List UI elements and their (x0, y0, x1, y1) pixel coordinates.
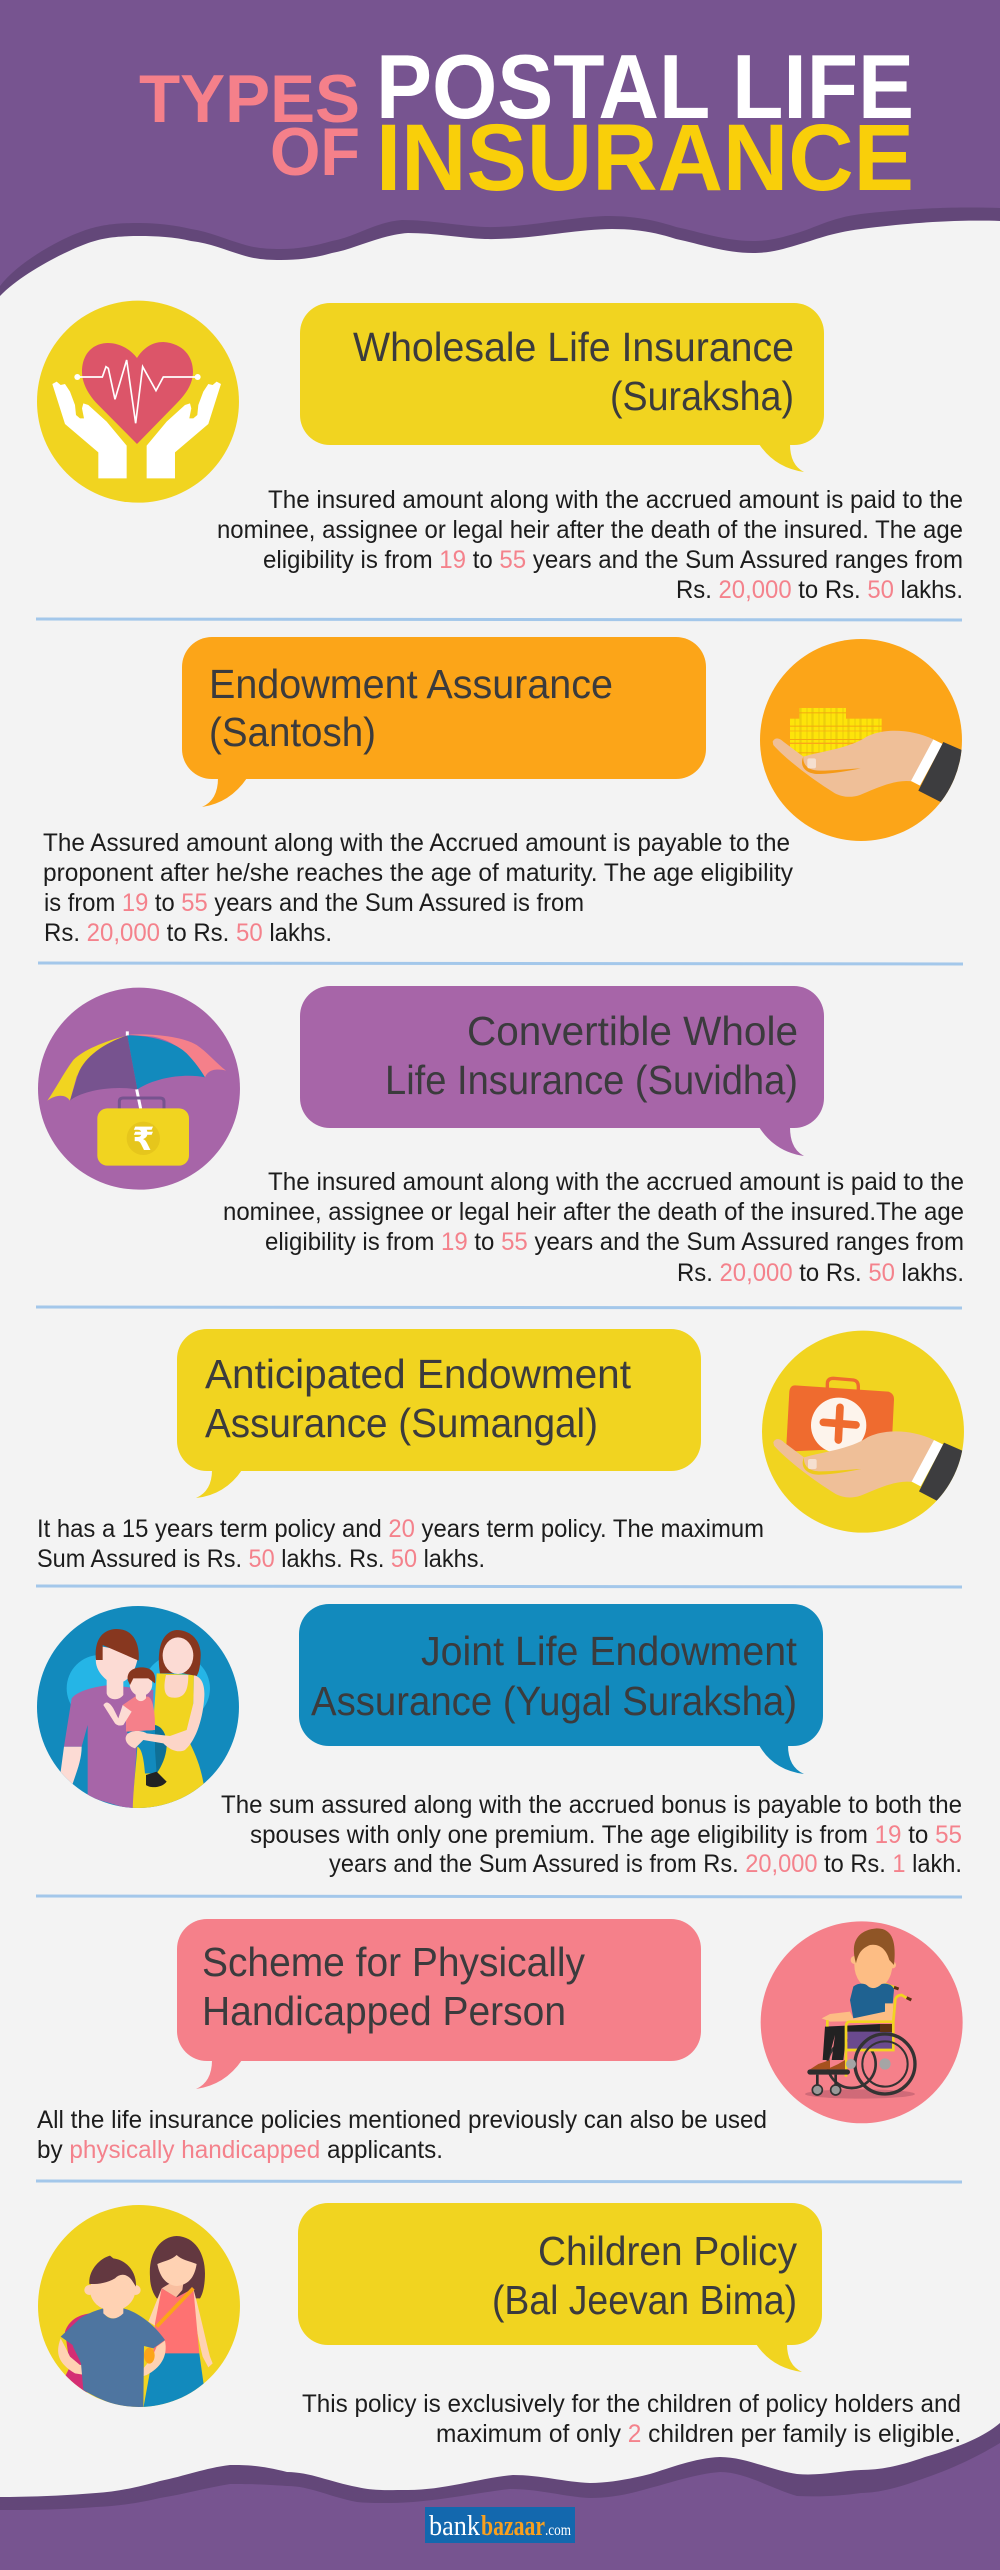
logo: bankbazaar: .com (545, 2522, 571, 2539)
panel: wholesale life insurance (37, 301, 963, 604)
text block: wholesale life: Rs. 20,000 to Rs. 50 lakhs. (676, 576, 963, 604)
text block: wholesale life: The insured amount along with the accrued amount is paid to the (268, 486, 963, 514)
speech bubble: anticipated (177, 1329, 701, 1498)
text block: children: This policy is exclusively for the children of policy holders and (302, 2390, 961, 2418)
text block: joint life: The sum assured along with the accrued bonus is payable to both the (221, 1791, 962, 1819)
text block: endowment: is from 19 to 55 years and the Sum Assured is from (44, 889, 584, 917)
speech bubble: endowment: Endowment Assurance (209, 661, 613, 707)
speech bubble: convertible: Convertible Whole (467, 1008, 798, 1054)
panel: endowment assurance (43, 637, 963, 947)
title: OF (270, 114, 360, 190)
logo: bankbazaar: bazaar (481, 2511, 545, 2542)
text block: convertible: The insured amount along with the accrued amount is paid to the (268, 1168, 964, 1196)
icon: umbrella over rupee case: ₹ (132, 1120, 154, 1158)
text block: endowment: The Assured amount along with the Accrued amount is payable to the (43, 829, 790, 857)
text block: joint life (221, 1791, 962, 1878)
text block: children: maximum of only 2 children per family is eligible. (436, 2420, 961, 2448)
title: INSURANCE (376, 105, 914, 211)
text block: endowment: proponent after he/she reaches the age of maturity. The age eligibility (43, 859, 793, 887)
speech bubble: wholesale life: Wholesale Life Insurance (353, 324, 794, 370)
icon: hand holding first aid case (762, 1331, 964, 1533)
text block: convertible: Rs. 20,000 to Rs. 50 lakhs. (677, 1259, 964, 1287)
speech bubble: wholesale life (300, 303, 824, 472)
text block: joint life: years and the Sum Assured is from Rs. 20,000 to Rs. 1 lakh. (329, 1850, 962, 1878)
panel: physically handicapped scheme (37, 1919, 963, 2164)
panel: convertible whole life insurance (38, 986, 964, 1287)
speech bubble: anticipated: Assurance (Sumangal) (205, 1400, 598, 1446)
title (139, 37, 914, 211)
speech bubble: convertible: Life Insurance (Suvidha) (385, 1057, 798, 1103)
text block: anticipated: It has a 15 years term policy and 20 years term policy. The maximum (37, 1515, 764, 1543)
icon: hand holding coins (760, 639, 963, 841)
speech bubble: endowment: (Santosh) (209, 709, 376, 755)
text block: convertible: eligibility is from 19 to 55 years and the Sum Assured ranges from (265, 1228, 964, 1256)
speech bubble: children: (Bal Jeevan Bima) (492, 2277, 797, 2323)
speech bubble: joint life: Assurance (Yugal Suraksha) (311, 1678, 797, 1724)
panel: children policy (38, 2203, 961, 2448)
speech bubble: handicapped (177, 1919, 701, 2089)
speech bubble: convertible (300, 986, 824, 1156)
text block: endowment (43, 829, 793, 947)
speech bubble: handicapped: Handicapped Person (202, 1988, 566, 2034)
speech bubble: handicapped: Scheme for Physically (202, 1939, 585, 1985)
panel: anticipated endowment assurance (37, 1329, 964, 1573)
text block: anticipated: Sum Assured is Rs. 50 lakhs. Rs. 50 lakhs. (37, 1545, 485, 1573)
speech bubble: children: Children Policy (538, 2228, 797, 2274)
text block: wholesale life: eligibility is from 19 to 55 years and the Sum Assured ranges from (263, 546, 963, 574)
text block: handicapped: by physically handicapped applicants. (37, 2136, 443, 2164)
logo: bankbazaar: bank (429, 2511, 480, 2542)
icon: person in wheelchair (761, 1921, 963, 2123)
logo: bankbazaar (425, 2507, 575, 2543)
header wave background (0, 0, 1000, 296)
text block: joint life: spouses with only one premium. The age eligibility is from 19 to 55 (250, 1821, 962, 1849)
text block: convertible (223, 1168, 964, 1287)
text block: handicapped: All the life insurance policies mentioned previously can also be used (37, 2106, 767, 2134)
icon: umbrella over rupee case (38, 988, 240, 1190)
icon: heart in caring hands (37, 301, 239, 503)
text block: endowment: Rs. 20,000 to Rs. 50 lakhs. (44, 919, 332, 947)
speech bubble: joint life (299, 1604, 823, 1774)
title: TYPES (139, 61, 360, 137)
speech bubble: anticipated: Anticipated Endowment (205, 1351, 632, 1397)
text block: convertible: nominee, assignee or legal heir after the death of the insured.The age (223, 1198, 964, 1226)
title: POSTAL LIFE (376, 37, 914, 138)
text block: wholesale life (217, 486, 963, 604)
panel: joint life endowment assurance (37, 1604, 962, 1878)
text block: children (302, 2390, 961, 2448)
speech bubble: wholesale life: (Suraksha) (610, 373, 794, 419)
footer wave background (0, 2423, 1000, 2570)
speech bubble: joint life: Joint Life Endowment (421, 1628, 798, 1674)
speech bubble: children (298, 2203, 822, 2372)
speech bubble: endowment (182, 637, 706, 807)
icon: family (37, 1606, 239, 1810)
icon: two children (38, 2205, 240, 2410)
text block: handicapped (37, 2106, 767, 2164)
text block: anticipated (37, 1515, 764, 1573)
text block: wholesale life: nominee, assignee or legal heir after the death of the insured. The age (217, 516, 963, 544)
